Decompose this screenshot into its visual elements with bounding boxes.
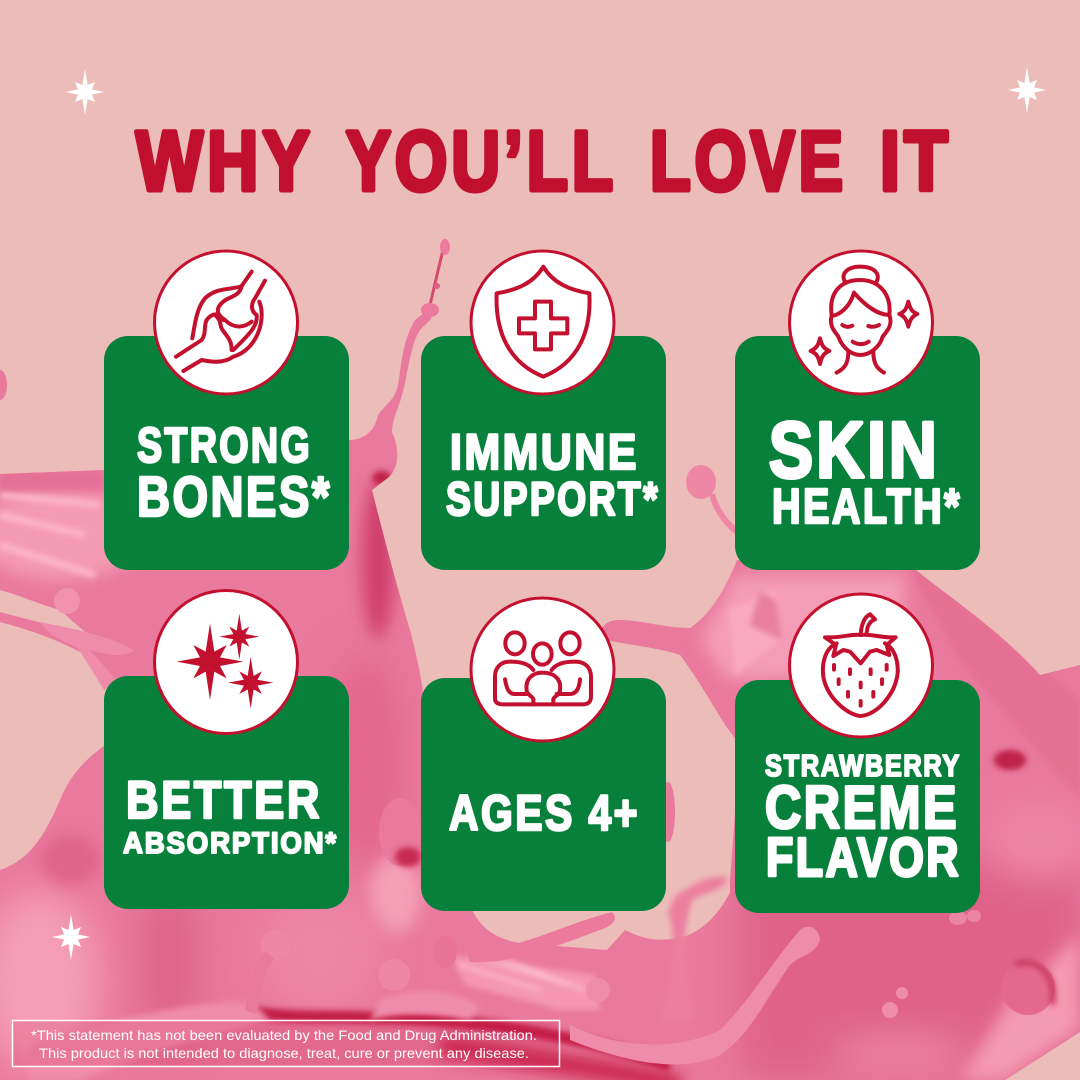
label	[769, 405, 962, 534]
label: ABSORPTION*	[123, 827, 338, 860]
label: BONES*	[137, 465, 332, 529]
title	[136, 114, 952, 208]
title: YOU’LL	[346, 114, 617, 208]
sparkle top left	[66, 69, 104, 115]
title: IT	[880, 114, 952, 208]
panel: immune support	[421, 251, 666, 570]
label	[446, 424, 660, 525]
label: AGES 4+	[449, 785, 640, 841]
icon: woman's face with sparkles	[811, 267, 917, 373]
label: STRAWBERRY	[765, 748, 961, 783]
sparkle bottom left	[52, 914, 90, 960]
label: BETTER	[126, 771, 322, 830]
panel: ages 4+	[421, 598, 666, 911]
label: HEALTH*	[772, 480, 962, 534]
label: FLAVOR	[766, 827, 961, 888]
icon: bone joint	[176, 272, 265, 371]
splash details: tendrils and droplets	[0, 239, 1055, 1064]
disclaimer box: *This statement has not been evaluated by the Food and Drug Administration.	[31, 1027, 537, 1043]
disclaimer box	[12, 1020, 560, 1066]
title: WHY	[136, 114, 314, 208]
label	[765, 748, 961, 888]
label: IMMUNE	[450, 424, 639, 480]
sparkle top right	[1008, 67, 1046, 113]
icon: sparkling stars	[177, 614, 273, 709]
title: LOVE	[650, 114, 847, 208]
label	[137, 419, 332, 529]
icon: shield with cross	[497, 267, 590, 377]
icon: strawberry	[823, 614, 898, 716]
background milk splash	[0, 239, 1080, 1080]
icon: family group	[495, 632, 591, 704]
panel: skin health	[735, 251, 980, 570]
panel: better absorption	[104, 590, 349, 909]
label: SUPPORT*	[446, 472, 660, 525]
label: SKIN	[769, 405, 940, 494]
label	[123, 771, 338, 860]
panel: strong bones	[104, 251, 349, 570]
label: CREME	[765, 774, 959, 841]
panel: strawberry creme flavor	[735, 594, 980, 913]
label: STRONG	[137, 419, 312, 473]
disclaimer box: This product is not intended to diagnose, treat, cure or prevent any disease.	[39, 1045, 529, 1061]
